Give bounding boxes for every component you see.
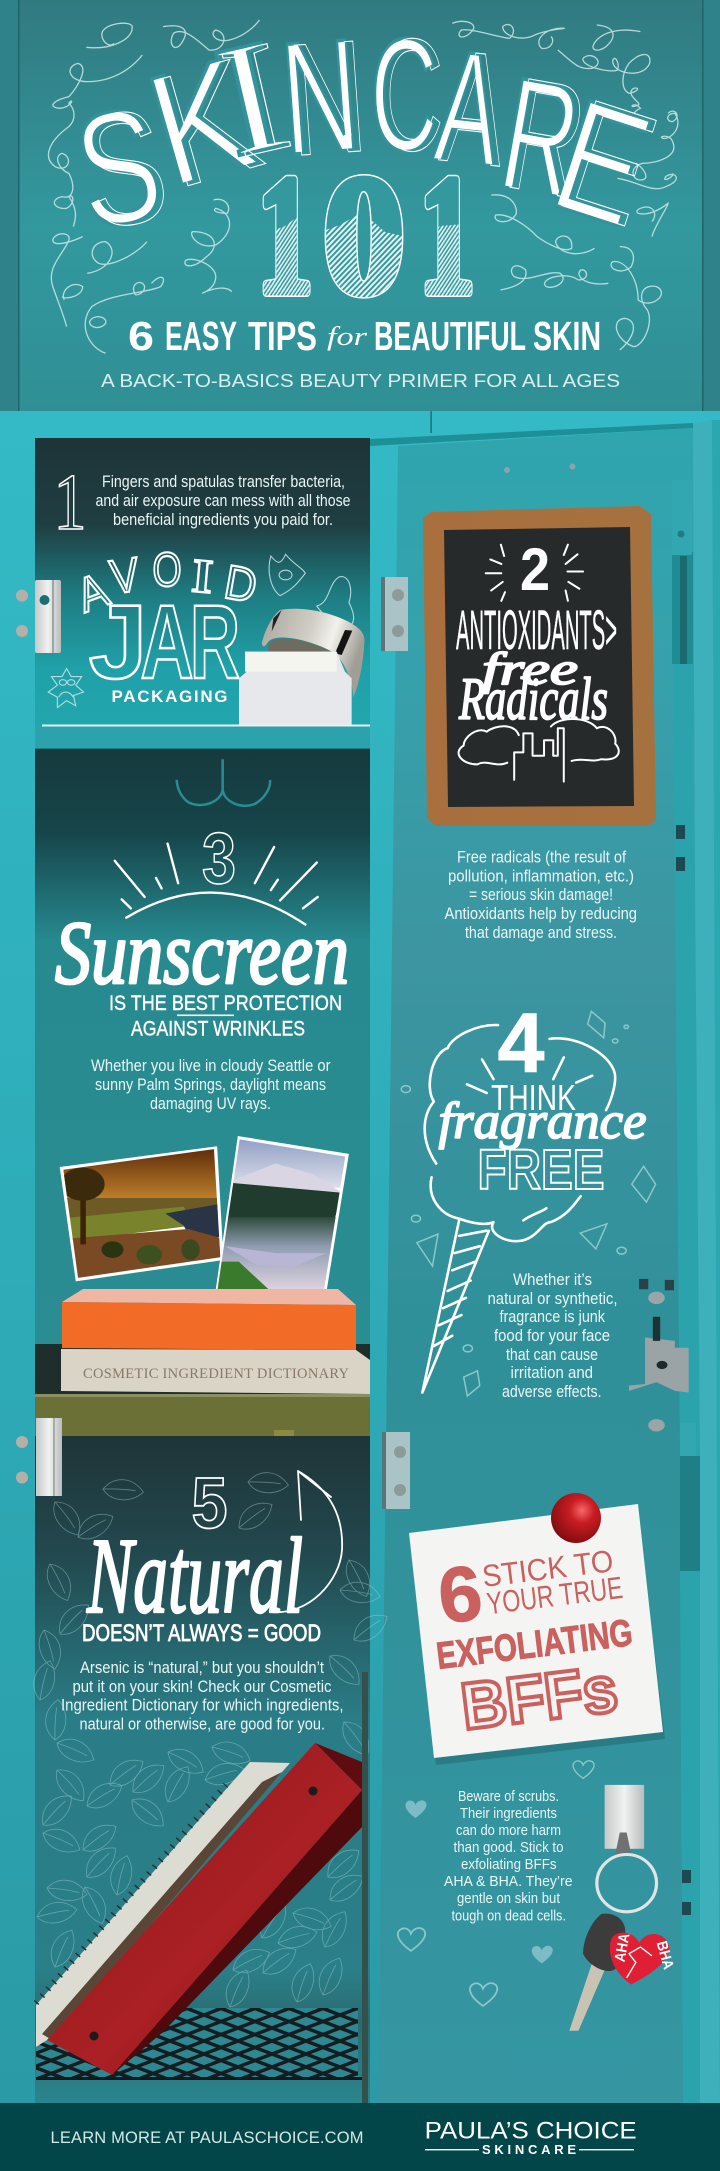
logo: paula's choice skincare: PAULA’S CHOICE [425, 2118, 637, 2144]
text: tip 3 body: Whether you live in cloudy Seattle or [91, 1057, 331, 1075]
numeral 3 with sun rays [115, 819, 318, 925]
title: SKINCARE: K [137, 24, 276, 222]
text: tip 4 body: natural or synthetic, [488, 1290, 618, 1308]
text: tip 6 body [444, 1789, 572, 1924]
panel: olive shelf [35, 1344, 370, 1443]
title: SKINCARE [63, 5, 674, 263]
decorative swirls [48, 20, 678, 353]
numeral 2 with rays: 2 [520, 536, 550, 604]
title: SKINCARE: R [490, 44, 591, 233]
heading: avoid jar packaging: O [152, 544, 182, 597]
title: 101 numerals: 1 [419, 142, 475, 330]
text: tip 5 body [61, 1659, 344, 1734]
heart keychain [610, 1932, 677, 1984]
subtitle: 6 easy tips: TIPS [248, 313, 317, 359]
heading: tip 3 sunscreen: AGAINST WRINKLES [131, 1018, 305, 1040]
heading: avoid jar packaging: A [140, 584, 194, 701]
icon: city skyline and smog [459, 719, 619, 782]
title: 101 numerals: 0 [323, 142, 405, 330]
title: SKINCARE: S [63, 72, 173, 262]
icons: germ doodles [48, 554, 354, 708]
decorative hearts [398, 1761, 594, 2006]
title: SKINCARE: C [376, 6, 444, 184]
jar lid [262, 609, 365, 697]
title: SKINCARE: N [276, 5, 364, 189]
text: exfoliating: EXFOLIATING [434, 1612, 635, 1678]
text: tip 4 body: adverse effects. [502, 1383, 602, 1401]
text: tip 4 body [488, 1271, 618, 1401]
decorative leaves [28, 1469, 393, 2011]
heading: avoid jar packaging [70, 544, 261, 706]
text: bffs: BFFs [457, 1651, 622, 1744]
text: tip 6 body: gentle on skin but [457, 1891, 560, 1907]
metal hook [605, 1785, 644, 1849]
text: tip 2 body: Antioxidants help by reducing [444, 905, 637, 923]
text: tip 4 body: that can cause [506, 1346, 598, 1364]
title: 101 numerals: 1 [257, 142, 313, 330]
chalkboard: tip 2 [423, 506, 656, 826]
dictionary book: COSMETIC INGREDIENT DICTIONARY [83, 1366, 350, 1382]
panel: tip 5 compartment [35, 1436, 370, 2103]
subtitle: 6 easy tips: 6 [128, 313, 154, 359]
heading: avoid jar packaging: D [220, 554, 261, 613]
panel: tip 1 compartment [35, 438, 370, 725]
title: SKINCARE: E [542, 65, 674, 261]
text: tip 5 body: Arsenic is “natural,” but you shouldn’t [80, 1659, 324, 1677]
title: 101 numerals [262, 174, 473, 299]
binder cover [315, 1743, 362, 1790]
text: tip 1 body: Fingers and spatulas transfer bacteria, [102, 473, 345, 491]
tagline: A BACK-TO-BASICS BEAUTY PRIMER FOR ALL AGES [101, 370, 620, 391]
heading: avoid jar packaging: J [89, 584, 147, 701]
text: natural: Natural [86, 1517, 303, 1636]
heading: tip 3 sunscreen [55, 819, 349, 1040]
decorative sparkles [401, 1011, 656, 1396]
photo: palm springs [60, 1146, 225, 1281]
icon: open cream jar [239, 609, 365, 725]
text: tip 3 body: damaging UV rays. [150, 1095, 271, 1113]
heading: avoid jar packaging: A [70, 562, 116, 623]
panel: top shelf [35, 724, 370, 750]
text: tip 6 body: Their ingredients [460, 1806, 557, 1822]
text: sunscreen: Sunscreen [55, 904, 349, 1003]
title: 101 numerals: 1 [257, 142, 313, 330]
photo: mountain lake [216, 1136, 349, 1291]
subtitle: 6 easy tips: BEAUTIFUL [374, 313, 526, 359]
text: tip 4 body: fragrance is junk [500, 1308, 606, 1326]
text: tip 5 body: Ingredient Dictionary for which ingredients, [61, 1696, 344, 1714]
text: radicals: Radicals [458, 666, 608, 732]
panel: tip 4 [401, 996, 656, 1396]
text: tip 5 body: put it on your skin! Check our Cosmetic [72, 1678, 332, 1696]
text: stick to your true: YOUR TRUE [485, 1570, 625, 1621]
icon: red push pin [551, 1493, 601, 1543]
icon: hook and keys [569, 1785, 677, 2031]
text: tip 4 body: irritation and [510, 1364, 593, 1382]
subtitle: 6 easy tips [128, 313, 601, 359]
icon: red binder [36, 1743, 362, 2075]
heading: avoid jar packaging: V [107, 547, 143, 604]
icon: book stack [61, 1289, 370, 1394]
text: tip 2 body [444, 848, 637, 942]
numeral 2 with rays [486, 536, 583, 604]
panel: tip 3 compartment [35, 749, 370, 1349]
numeral 1: 1 [53, 458, 87, 548]
numeral 3 with sun rays: 3 [202, 819, 236, 899]
icon: wire rack [36, 1672, 368, 2103]
text: tip 2 body: = serious skin damage! [469, 886, 613, 904]
logo: paula's choice skincare: SKINCARE [482, 2142, 576, 2157]
heading: avoid jar packaging: PACKAGING [112, 687, 228, 706]
icon: left hinge [16, 580, 61, 653]
text: tip 2 body: that damage and stress. [465, 924, 617, 942]
heading: avoid jar packaging: I [190, 548, 215, 603]
title: 101 numerals: 1 [257, 142, 313, 330]
text: tip 6 body: Beware of scrubs. [458, 1789, 559, 1805]
title: SKINCARE: K [131, 23, 270, 221]
dictionary book [61, 1349, 370, 1394]
title: 101 numerals: 0 [323, 142, 405, 330]
panel: footer [0, 2103, 720, 2171]
text: stick to your true: STICK TO [480, 1544, 615, 1594]
heading: tip 5 natural [82, 1463, 342, 1647]
title: SKINCARE: A [429, 16, 509, 200]
title: 101 numerals: 1 [419, 142, 475, 330]
text: free: FREE [478, 1138, 604, 1202]
text: tip 6 body: can do more harm [456, 1823, 561, 1839]
heading: tip 3 sunscreen: IS THE BEST PROTECTION [109, 992, 342, 1015]
subtitle: 6 easy tips: EASY [165, 313, 237, 359]
text: tip 2 body: Free radicals (the result of [457, 848, 626, 866]
panel: header background [0, 0, 720, 411]
text: free: free [482, 643, 578, 694]
text: tip 4 body: food for your face [494, 1327, 610, 1345]
heart keychain: BHA [652, 1939, 677, 1971]
title: 101 numerals: 0 [323, 142, 405, 330]
text: tip 6 body: AHA & BHA. They’re [444, 1874, 572, 1890]
key ring [597, 1855, 657, 1912]
text: tip 5 body: natural or otherwise, are good for you. [80, 1716, 325, 1734]
icon: curved arrow [270, 1471, 342, 1612]
numeral 6: 6 [434, 1548, 486, 1640]
text: tip 3 body: sunny Palm Springs, daylight means [95, 1076, 326, 1094]
text: tip 1 body: and air exposure can mess with all those [96, 492, 350, 510]
text: tip 6 body: exfoliating BFFs [461, 1857, 556, 1873]
icon: door latch hardware [629, 1279, 689, 1431]
title: SKINCARE: I [202, 5, 298, 191]
car key [569, 1962, 606, 2031]
icon: coat hook [177, 759, 270, 806]
title: SKINCARE: E [536, 65, 668, 261]
notebook pages [36, 1762, 290, 2047]
icon: door hinge [381, 577, 408, 651]
orange book [62, 1289, 356, 1350]
icon: lower left hinge [16, 1418, 62, 1496]
title: SKINCARE: S [69, 73, 179, 263]
text: tip 3 body [91, 1057, 331, 1113]
title: SKINCARE: A [435, 16, 515, 200]
panel: open door [370, 423, 700, 2103]
footer link text: LEARN MORE AT PAULASCHOICE.COM [50, 2129, 364, 2147]
text: tip 1 body: beneficial ingredients you paid for. [113, 511, 333, 529]
title: SKINCARE: N [283, 6, 371, 190]
text: fragrance: fragrance [438, 1093, 646, 1150]
icon: lower door hinge [382, 1432, 410, 1509]
text: tip 1 body [96, 473, 350, 529]
logo: paula's choice skincare [425, 2118, 637, 2157]
heading: avoid jar packaging: R [190, 582, 240, 700]
icon: cotton candy [422, 1025, 615, 1393]
title: SKINCARE: I [208, 6, 304, 192]
text: tip 6 body: tough on dead cells. [452, 1908, 566, 1924]
text: tip 6 body: than good. Stick to [454, 1840, 564, 1856]
text: stick to your true [480, 1544, 625, 1621]
heading: tip 5 natural: DOESN’T ALWAYS = GOOD [82, 1620, 321, 1647]
numeral 5: 5 [191, 1463, 228, 1544]
title: SKINCARE: C [370, 6, 438, 184]
heart keychain: AHA [612, 1932, 634, 1963]
subtitle: 6 easy tips: SKIN [533, 313, 601, 359]
subtitle: 6 easy tips: for [327, 322, 368, 351]
callout: tip 6 note card [409, 1504, 665, 1765]
text: tip 4 body: Whether it’s [513, 1271, 592, 1289]
panel: locker frame [0, 411, 720, 2103]
title: 101 numerals: 1 [419, 142, 475, 330]
title: SKINCARE: R [496, 44, 597, 233]
numeral 4: 4 [498, 996, 545, 1090]
text: tip 2 body: pollution, inflammation, etc.) [448, 868, 634, 886]
text: think: THINK [491, 1077, 576, 1118]
